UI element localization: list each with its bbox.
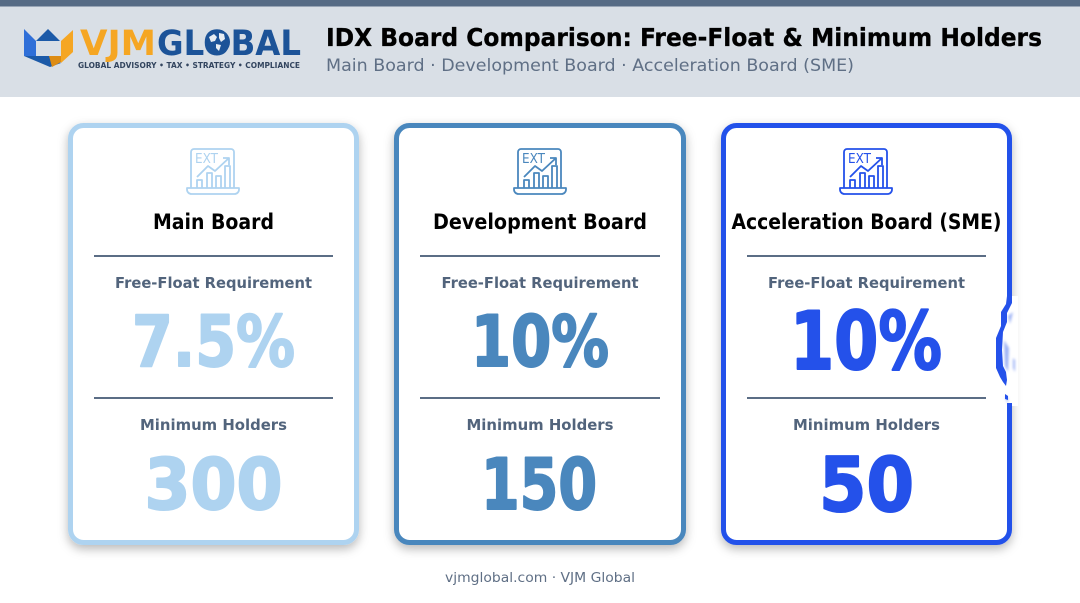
icon: chart on laptop: EXT (848, 152, 871, 167)
logo tagline: GLOBAL ADVISORY • TAX • STRATEGY • COMPLIANCE (78, 61, 300, 70)
logo wordmark: VJM (80, 24, 156, 64)
subtitle: Main Board · Development Board · Acceleration Board (SME) (326, 56, 854, 76)
free-float value: 7.5% (132, 301, 295, 383)
icon: logo house mark (24, 29, 73, 67)
panel: Main Board (70, 126, 356, 542)
minimum holders value: 300 (144, 444, 282, 526)
icon: chart on laptop: EXT (195, 152, 218, 167)
header band (0, 0, 1080, 97)
heading: Main Board (153, 210, 274, 234)
logo wordmark (80, 24, 301, 64)
logo wordmark: GLOBAL (157, 24, 301, 64)
minimum holders label: Minimum Holders (140, 416, 287, 434)
icon: chart on laptop (187, 149, 239, 194)
free-float value: 10% (471, 301, 609, 383)
free-float label: Free-Float Requirement (442, 274, 639, 292)
footer: vjmglobal.com · VJM Global (445, 570, 635, 586)
title: IDX Board Comparison: Free-Float & Minimum Holders (326, 23, 1042, 52)
icon: chart on laptop (514, 149, 566, 194)
heading: Development Board (433, 210, 647, 234)
icon: chart on laptop (840, 149, 892, 194)
minimum holders value: 150 (481, 444, 597, 526)
heading: Acceleration Board (SME) (732, 210, 1002, 234)
free-float label: Free-Float Requirement (115, 274, 313, 292)
minimum holders label: Minimum Holders (466, 416, 614, 434)
panel: Acceleration Board (SME) (724, 126, 1018, 542)
torn border artefact (996, 296, 1018, 407)
free-float label: Free-Float Requirement (768, 274, 966, 292)
free-float value: 10% (790, 295, 942, 388)
minimum holders value: 50 (819, 441, 914, 529)
icon: chart on laptop: EXT (522, 152, 545, 167)
panel: Development Board (396, 126, 684, 542)
logo: VJM Global (24, 24, 301, 70)
minimum holders label: Minimum Holders (793, 416, 940, 434)
